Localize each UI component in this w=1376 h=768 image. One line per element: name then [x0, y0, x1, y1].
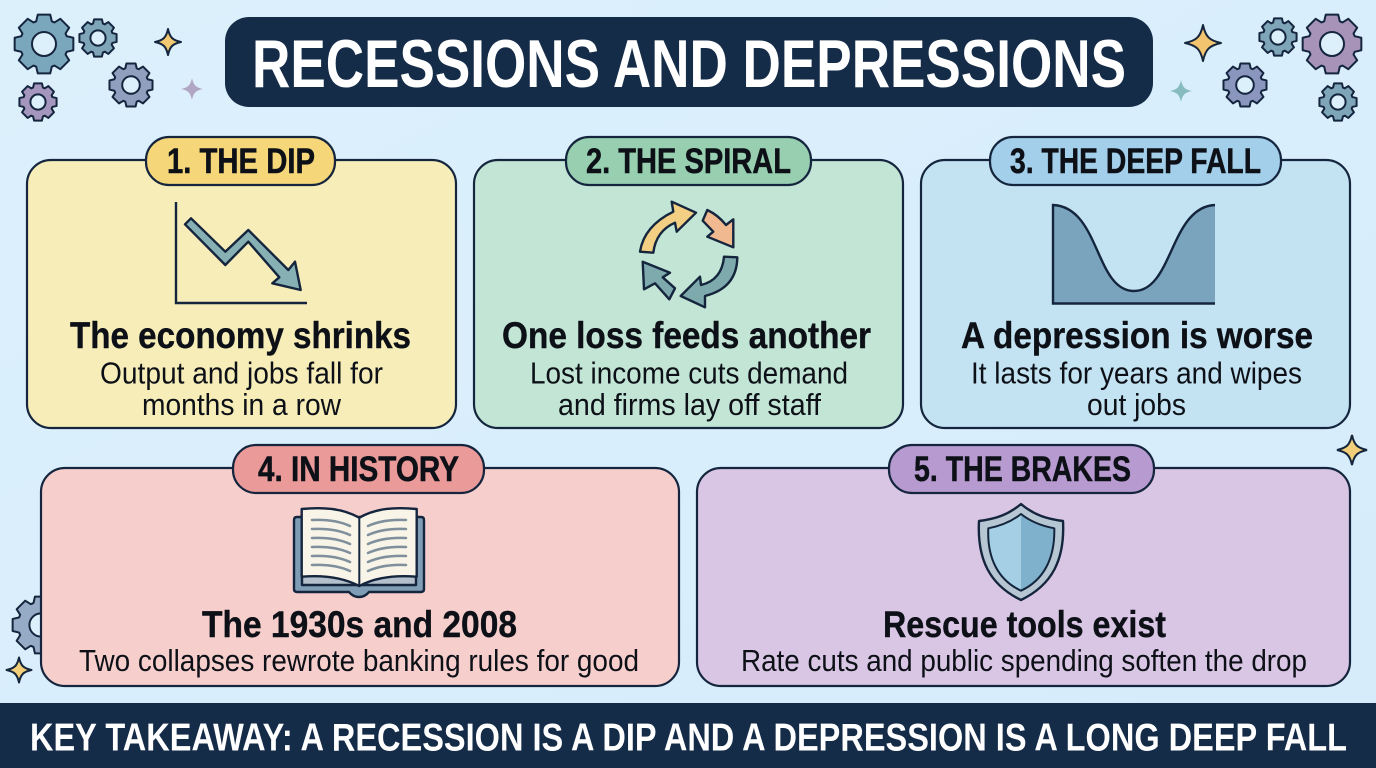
badge: the deep fall — [990, 137, 1281, 185]
icon: cycle arrows — [640, 202, 737, 307]
badge: in history: 4. IN HISTORY — [258, 450, 459, 489]
icon: depression curve — [1053, 205, 1215, 304]
heading: A depression is worse — [961, 315, 1313, 356]
key takeaway bar — [0, 703, 1376, 768]
panel: 3. the deep fall — [921, 137, 1350, 428]
body text: Lost income cuts demand — [530, 356, 848, 390]
body text: Output and jobs fall for — [100, 356, 383, 390]
badge: the dip — [146, 137, 335, 185]
decoration: sparkle right — [1337, 435, 1367, 465]
body text: out jobs — [1087, 387, 1186, 422]
title: RECESSIONS AND DEPRESSIONS — [252, 26, 1126, 102]
decoration: gears and sparkles top right — [1170, 15, 1361, 121]
body text — [100, 356, 383, 422]
badge: the spiral — [566, 137, 811, 185]
badge: the spiral: 2. THE SPIRAL — [586, 142, 791, 181]
icon: shield — [979, 504, 1063, 600]
icon: open book — [294, 508, 424, 597]
body text — [971, 356, 1302, 422]
body text: months in a row — [142, 387, 342, 422]
body text: Rate cuts and public spending soften the drop — [741, 643, 1307, 678]
body text: It lasts for years and wipes — [971, 356, 1302, 390]
panel: 2. the spiral — [474, 137, 903, 428]
badge: the brakes: 5. THE BRAKES — [914, 450, 1131, 489]
body text: Two collapses rewrote banking rules for good — [79, 643, 639, 678]
body text: and firms lay off staff — [558, 387, 821, 422]
badge: the brakes — [889, 445, 1154, 493]
body text — [530, 356, 848, 422]
heading: Rescue tools exist — [883, 604, 1166, 645]
badge: the deep fall: 3. THE DEEP FALL — [1010, 142, 1261, 181]
panel: 4. in history — [41, 445, 679, 686]
icon: falling line chart — [176, 202, 307, 303]
title banner — [225, 17, 1153, 107]
panel: 1. the dip — [27, 137, 456, 428]
heading: The economy shrinks — [70, 315, 411, 356]
heading: The 1930s and 2008 — [202, 604, 517, 645]
panel: 5. the brakes — [697, 445, 1350, 686]
heading: One loss feeds another — [502, 315, 871, 356]
decoration: gears and sparkles top left — [15, 15, 203, 121]
decoration: gear and sparkle lower left — [6, 597, 69, 682]
badge: the dip: 1. THE DIP — [167, 142, 315, 181]
